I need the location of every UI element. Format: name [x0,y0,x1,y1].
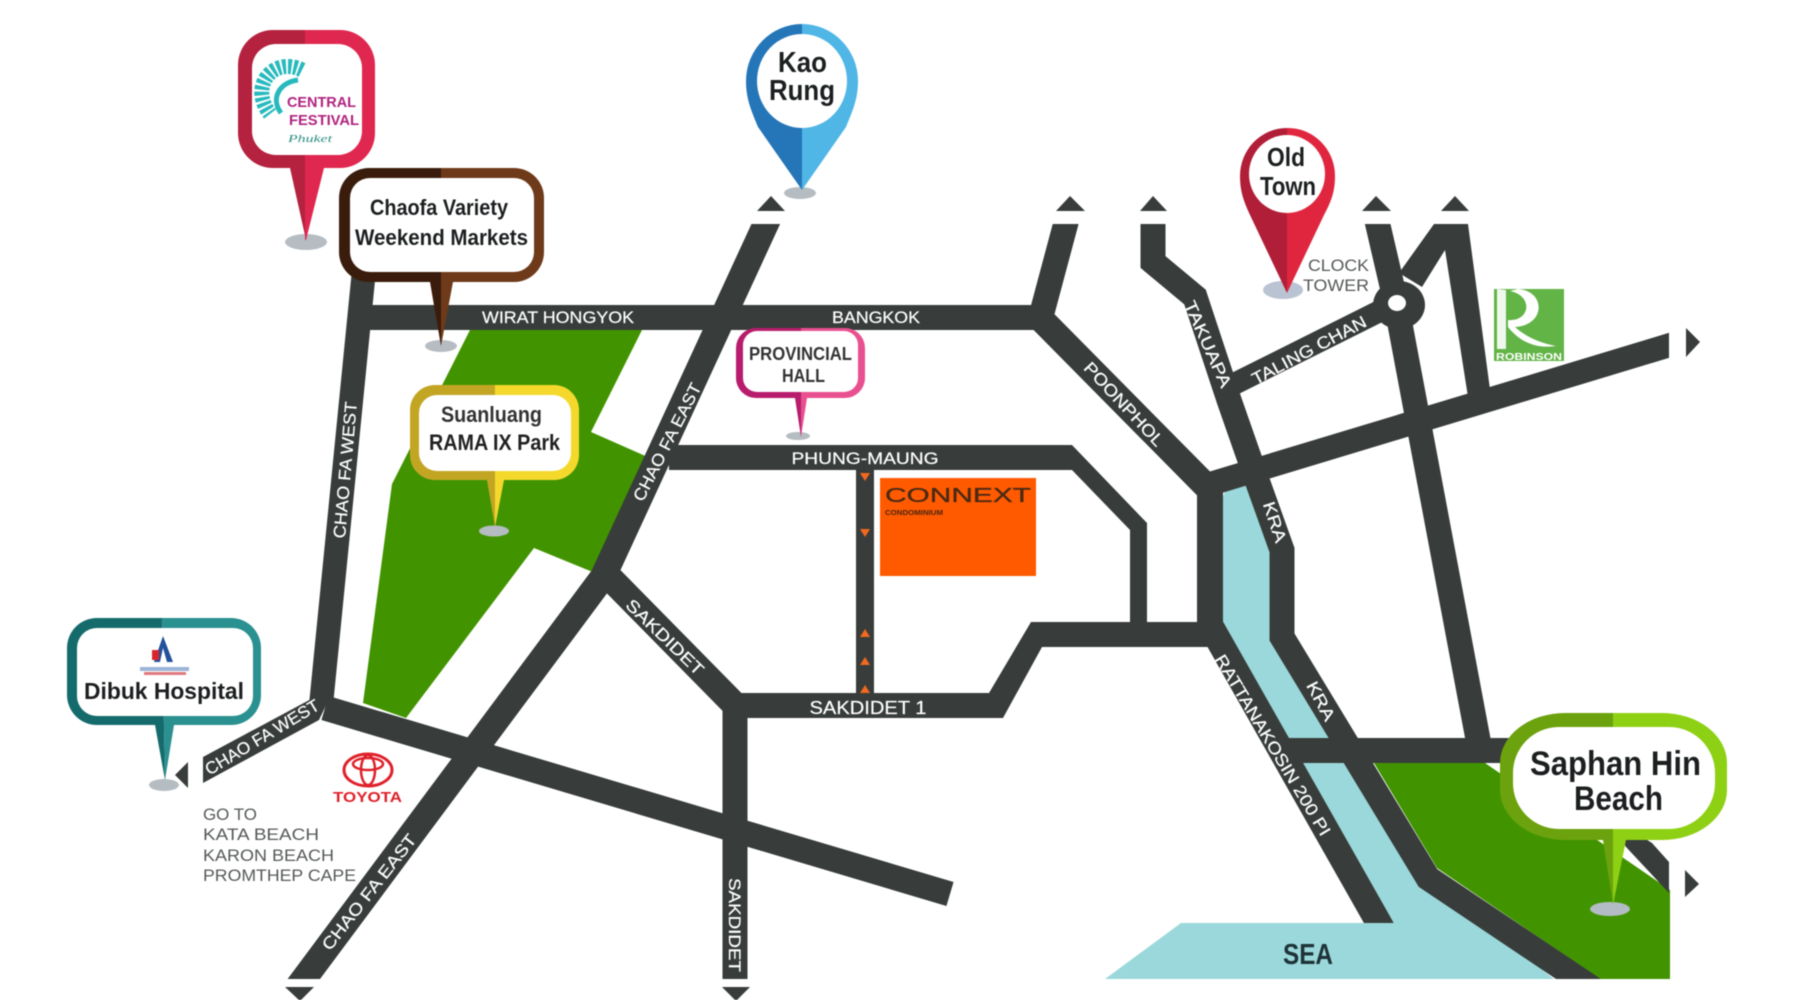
pin: Central Festival [238,30,375,250]
pin: Kao Rung [746,24,858,199]
road labels: TAKUAPA [1180,298,1235,391]
pin: Saphan Hin Beach: Saphan Hin [1530,745,1701,783]
text block: go to beaches: KATA BEACH [203,825,319,844]
pin: Old Town: Old [1267,142,1305,172]
building: Connext condominium: CONDOMINIUM [885,510,943,517]
road labels: WIRAT HONGYOK [482,308,635,327]
text: sea: SEA [1283,939,1333,971]
text block: go to beaches: PROMTHEP CAPE [203,866,356,885]
road labels [202,298,1370,972]
pin: Kao Rung: Kao [778,47,827,79]
pin: Chaofa Variety Weekend Markets [339,168,544,352]
road labels: KRA [1302,678,1339,725]
river and sea [1105,483,1554,979]
pin: Saphan Hin Beach [1500,713,1727,916]
logo: Dibuk Hospital [140,636,189,675]
road labels: PHUNG-MAUNG [792,449,938,468]
logo: Toyota: TOYOTA [333,789,402,806]
logo: Robinson [1494,289,1564,363]
road labels: CHAO FA EAST [629,380,705,504]
pin: Provincial Hall: PROVINCIAL [749,344,852,364]
pin: Dibuk Hospital [67,618,261,791]
pin: Old Town: Town [1260,171,1316,201]
text: clock tower: CLOCK [1308,256,1370,275]
road network [203,204,1690,1000]
road labels: SAKDIDET [622,595,708,679]
text block: go to beaches: KARON BEACH [203,846,334,865]
pin: Suanluang RAMA IX Park: Suanluang [441,402,542,427]
pin: Provincial Hall [736,328,865,440]
road labels: TALING CHAN [1249,312,1370,389]
park: Suanluang green area [363,330,650,718]
pin: Suanluang RAMA IX Park [410,385,579,536]
pin: Central Festival: Phuket [287,133,333,145]
road labels: RATTANAKOSIN 200 PI [1211,651,1334,839]
pin: Old Town [1240,128,1335,299]
road labels: SAKDIDET 1 [810,698,926,718]
pin: Chaofa Variety Weekend Markets: Weekend Markets [355,225,528,250]
pin: Dibuk Hospital: Dibuk Hospital [84,678,244,704]
pin: Saphan Hin Beach: Beach [1574,780,1663,818]
building: Connext condominium: CONNEXT [885,485,1031,507]
text: clock tower [1303,256,1370,295]
pin: Provincial Hall: HALL [782,366,825,386]
text: clock tower: TOWER [1303,276,1369,295]
building: Connext condominium [880,478,1036,576]
road labels: CHAO FA WEST [330,401,361,539]
pin: Kao Rung: Rung [769,75,835,107]
icons: orange arrows on access road [860,473,870,693]
road labels: SAKDIDET [725,878,744,972]
text block: go to beaches [203,805,356,885]
road labels: CHAO FA WEST [202,696,323,779]
road labels: CHAO FA EAST [318,831,421,954]
road labels: POONPHOL [1080,358,1167,450]
pin: Chaofa Variety Weekend Markets: Chaofa Variety [370,195,509,220]
road labels: BANGKOK [832,308,921,327]
logo: Robinson: ROBINSON [1496,352,1562,363]
logo: Central Festival arc [262,66,302,114]
pin: Central Festival: CENTRAL [287,94,356,111]
arrows: road direction markers [175,196,1700,1000]
logo: Toyota [333,754,402,806]
text block: go to beaches: GO TO [203,805,257,824]
park: Saphan Hin green area [1374,763,1670,979]
road labels: KRA [1259,499,1290,546]
pin: Central Festival: FESTIVAL [289,112,359,129]
pin: Suanluang RAMA IX Park: RAMA IX Park [429,430,561,455]
